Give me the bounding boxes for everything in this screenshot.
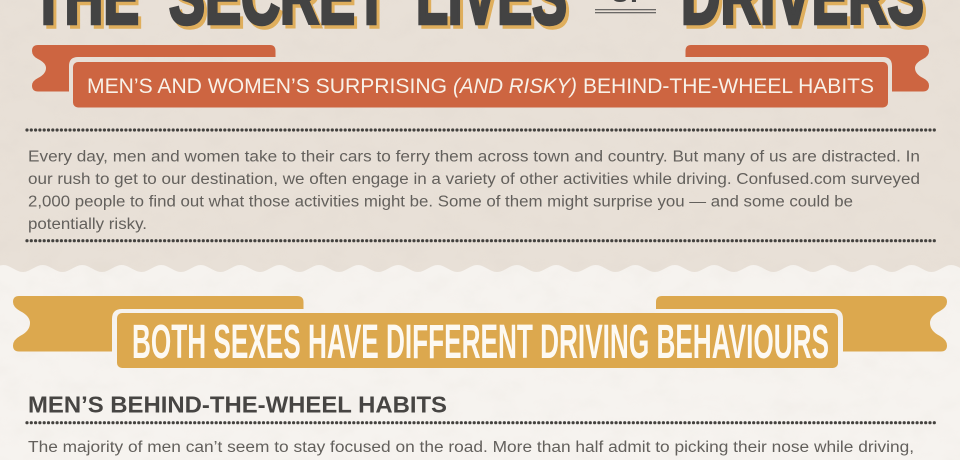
dotted divider: [27, 421, 935, 424]
intro paragraph: 2,000 people to find out what those activities might be. Some of them might surprise you — and some could be: [28, 194, 853, 210]
ribbon text: MEN’S AND WOMEN’S SURPRISING: [87, 75, 447, 98]
intro paragraph: Every day, men and women take to their cars to ferry them across town and country. But many of us are distracted. In: [28, 148, 920, 166]
title small word "of": [595, 0, 656, 13]
subtitle ribbon: [32, 45, 929, 108]
ribbon tail left: [32, 45, 276, 92]
ribbon text: [87, 75, 874, 98]
section ribbon tail right: [656, 296, 947, 352]
ribbon tail right: [686, 45, 929, 92]
title: [32, 0, 927, 44]
ribbon text: BEHIND-THE-WHEEL HABITS: [583, 75, 874, 98]
dotted divider: [27, 128, 935, 132]
ribbon front: [73, 62, 888, 108]
intro paragraph: potentially risky.: [28, 216, 147, 233]
ribbon text: (AND RISKY): [453, 75, 577, 98]
section ribbon front: [117, 313, 838, 368]
dotted divider: [27, 239, 935, 242]
heading: men's habits: MEN’S BEHIND-THE-WHEEL HABITS: [28, 392, 447, 418]
title words: [32, 0, 924, 40]
section ribbon tail left: [13, 296, 304, 352]
intro paragraph: [28, 148, 920, 233]
men's habits paragraph: The majority of men can’t seem to stay focused on the road. More than half admit to picking their nose while driving,: [28, 439, 914, 456]
intro paragraph: our rush to get to our destination, we often engage in a variety of other activities while driving. Confused.com surveyed: [28, 171, 920, 188]
title shadow: [35, 0, 927, 44]
intro section background with scalloped edge: [0, 0, 960, 272]
section ribbon: [13, 296, 947, 369]
